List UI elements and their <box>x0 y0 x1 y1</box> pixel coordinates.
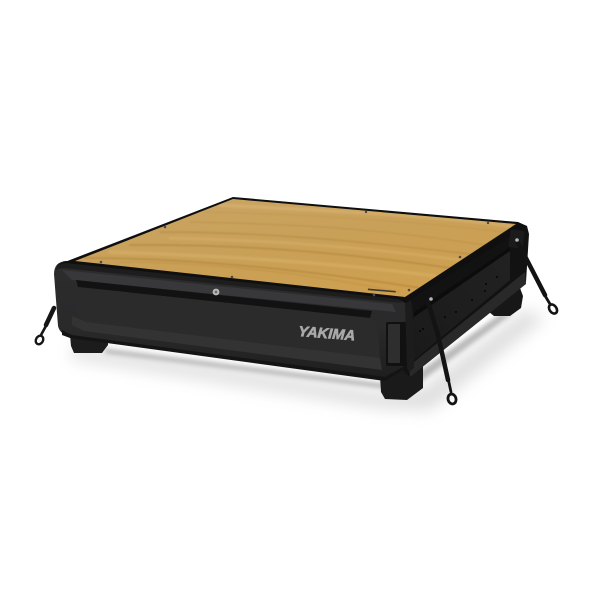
lock <box>213 289 219 295</box>
latch <box>386 322 407 366</box>
right side panel <box>402 224 529 377</box>
rear right foot <box>489 288 523 316</box>
wood grain <box>85 205 510 292</box>
drawer face <box>78 287 380 362</box>
wood deck <box>75 199 516 297</box>
left strap <box>34 308 54 346</box>
right corner bracket <box>508 229 525 249</box>
side rivets <box>419 276 498 332</box>
drawer lower lip <box>72 316 382 370</box>
lid top band <box>56 261 402 303</box>
front left foot <box>70 335 108 353</box>
front right foot <box>380 360 423 400</box>
top frame <box>57 197 527 303</box>
storage box product <box>34 190 559 405</box>
right corner post <box>405 300 414 372</box>
front strap <box>428 297 457 405</box>
drawer recess shadow line <box>76 280 372 318</box>
ground shadow <box>70 310 545 410</box>
deck screws and mark <box>100 211 489 296</box>
right strap <box>515 238 559 315</box>
YAKIMA logo: YAKIMA <box>298 324 356 344</box>
front panel <box>54 261 414 381</box>
